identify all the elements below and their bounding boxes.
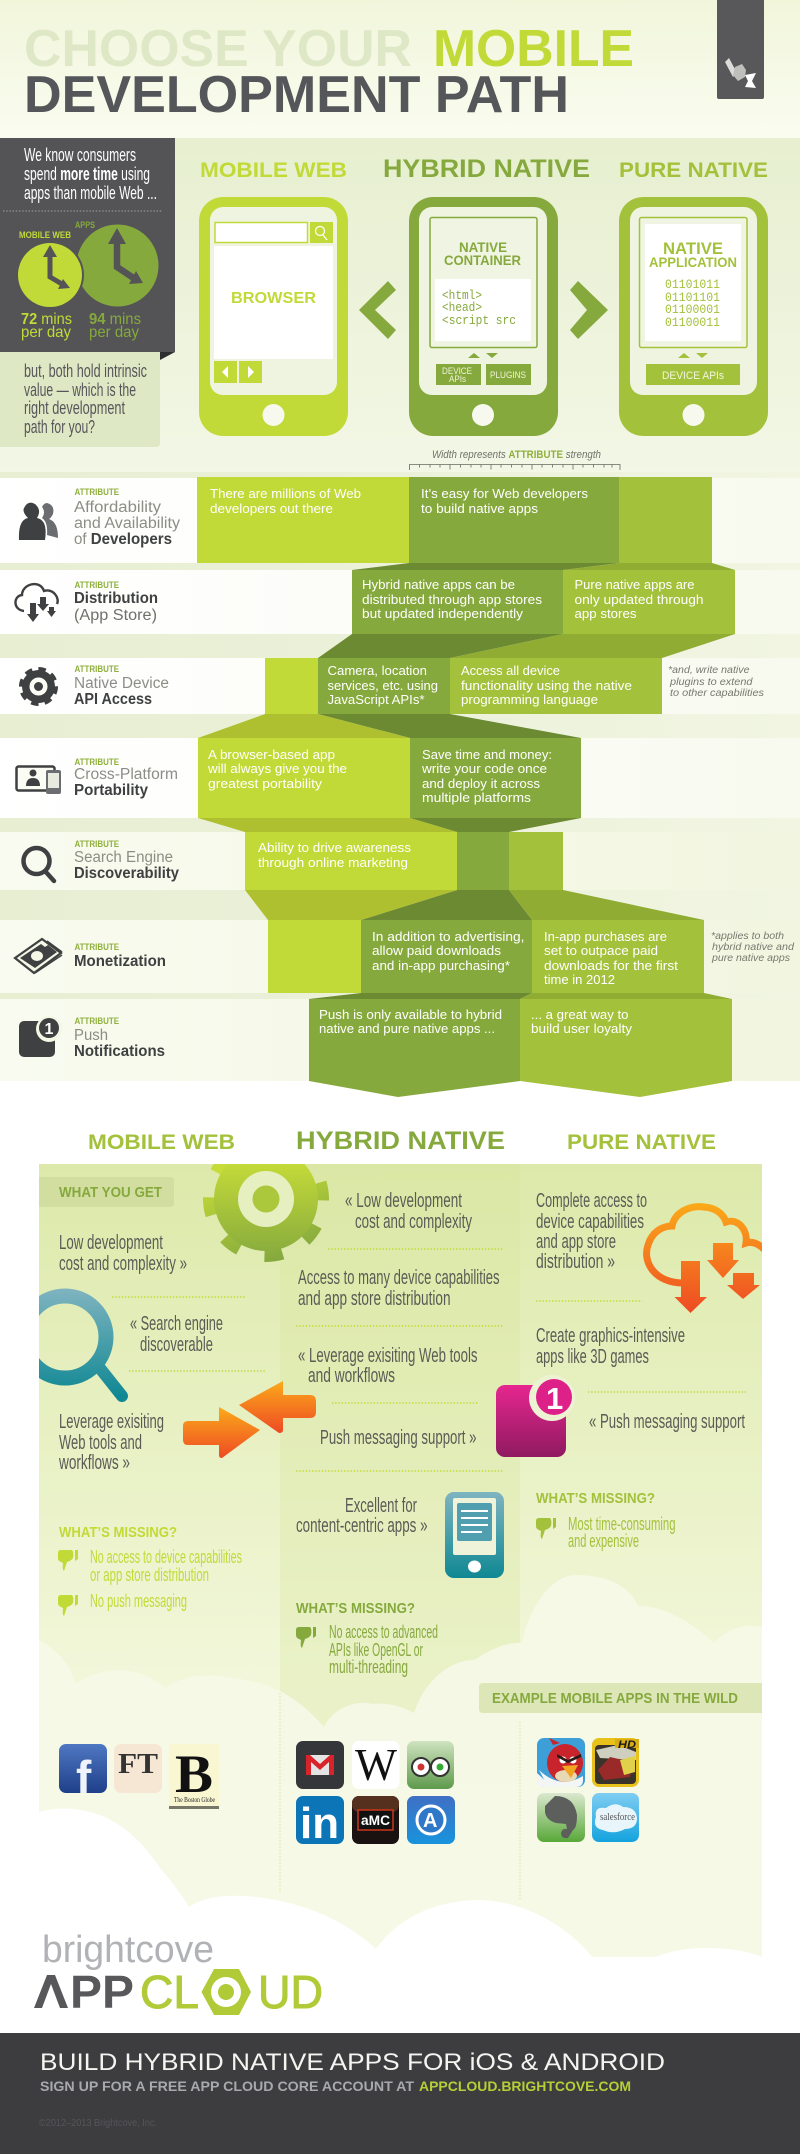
phone: hybrid native: PLUGINS: [490, 370, 526, 380]
missing: pure native: WHAT’S MISSING?: [536, 1490, 655, 1507]
column: hybrid native benefits: « Low development: [345, 1190, 462, 1212]
column: mobile web benefits: « Search engine: [130, 1313, 223, 1335]
phone: pure native: 01101011: [665, 277, 720, 292]
column headings: comparison: MOBILE WEB: [88, 1131, 235, 1154]
panel: question: value — which is the: [24, 380, 136, 400]
logo: brightcove appcloud: [34, 1929, 323, 2018]
missing: mobile web: No push messaging: [90, 1591, 187, 1611]
column headings: MOBILE WEB: [200, 159, 347, 182]
phone: mobile web: [199, 197, 348, 436]
missing: hybrid native: APIs like OpenGL or: [329, 1640, 423, 1660]
row: distribution: ATTRIBUTE: [74, 580, 119, 590]
row: push notifications: Notifications: [74, 1043, 165, 1060]
column dividers: [280, 1693, 520, 1900]
icon: pink notification: [496, 1375, 575, 1457]
panel: question: right development: [24, 398, 125, 418]
row: portability: ATTRIBUTE: [74, 757, 119, 767]
row bands: [0, 472, 800, 1081]
row: api access: plugins to extend: [669, 676, 754, 688]
phone: pure native: 01101101: [665, 290, 720, 305]
column: hybrid native benefits: cost and complexity: [355, 1211, 472, 1233]
row: developers: Affordability: [74, 499, 161, 516]
panel: time spent: 94 mins: [89, 311, 141, 328]
row: distribution: app stores: [574, 606, 637, 621]
app icons: pure native: [537, 1738, 639, 1842]
arrow: left: [359, 281, 396, 339]
title: CHOOSE YOUR: [24, 20, 412, 78]
row: api access: *and, write native: [668, 664, 750, 676]
footer: APPCLOUD.BRIGHTCOVE.COM: [419, 2078, 631, 2094]
app icons: hybrid native: in: [300, 1799, 339, 1848]
row: distribution: Hybrid native apps can be: [362, 577, 515, 592]
row: search: Search Engine: [74, 849, 173, 866]
missing: hybrid native: [296, 1600, 438, 1677]
column headings: comparison: [88, 1127, 716, 1155]
app icons: hybrid native: aMC: [361, 1812, 390, 1828]
example apps label: [479, 1683, 762, 1713]
logo: brightcove appcloud: PP: [70, 1966, 134, 2018]
column: pure native benefits: Create graphics-intensive: [536, 1325, 685, 1347]
app icons: pure native: HD: [618, 1739, 636, 1751]
scale legend: Width represents ATTRIBUTE strength: [432, 449, 601, 461]
column: hybrid native benefits: and app store distribution: [298, 1288, 450, 1310]
panel: time spent: apps than mobile Web ...: [24, 183, 157, 203]
panel: hybrid column tint: [280, 1164, 520, 1784]
row: monetization: [15, 929, 795, 987]
app icons: mobile web: f: [76, 1751, 92, 1803]
row: push notifications: [19, 1007, 633, 1060]
app icons: mobile web: The Boston Globe: [174, 1796, 215, 1804]
intro section background: [0, 138, 800, 478]
scale legend: [410, 449, 620, 470]
row: push notifications: Push: [74, 1027, 108, 1044]
row: developers: There are millions of Web: [210, 486, 361, 501]
row: api access: API Access: [74, 691, 152, 708]
phone: pure native: 01100011: [665, 315, 720, 330]
footer: BUILD HYBRID NATIVE APPS FOR iOS & ANDROID: [40, 2049, 665, 2076]
footer: ©2012–2013 Brightcove, Inc.: [39, 2118, 157, 2129]
foreground white cloud: [39, 1808, 762, 2033]
row: push notifications: ... a great way to: [531, 1007, 628, 1022]
panel: time spent: We know consumers: [24, 145, 136, 165]
phone: hybrid native: [409, 197, 558, 436]
app icons: hybrid native: W: [355, 1739, 398, 1790]
app icons: hybrid native: A: [423, 1810, 437, 1832]
row: monetization: allow paid downloads: [372, 943, 502, 958]
column: mobile web benefits: discoverable: [140, 1334, 213, 1356]
row: portability: Portability: [74, 782, 148, 799]
missing: pure native: and expensive: [568, 1531, 639, 1551]
icon: pink notification: 1: [546, 1381, 563, 1416]
arrow: right: [570, 281, 608, 339]
app icons: mobile web: [59, 1744, 219, 1809]
row: push notifications: native and pure native apps ...: [319, 1021, 495, 1036]
panel: comparison background: [39, 1164, 762, 1957]
row: portability: multiple platforms: [422, 790, 532, 805]
phone: pure native: [619, 197, 768, 436]
title: [24, 20, 634, 124]
column: hybrid native benefits: Excellent for: [345, 1495, 417, 1517]
row: api access: functionality using the native: [461, 678, 632, 693]
icon: teal phone: [445, 1492, 504, 1578]
what you get label: [39, 1177, 174, 1207]
missing: mobile web: [58, 1524, 242, 1616]
phone: pure native: NATIVE: [663, 239, 723, 258]
row: monetization: Monetization: [74, 953, 166, 970]
row: api access: Camera, location: [328, 663, 427, 678]
row: monetization: hybrid native and: [712, 941, 795, 953]
panel: time spent: per day: [21, 324, 71, 341]
panel: time spent: 72 mins: [21, 311, 72, 328]
logo: brightcove appcloud: brightcove: [42, 1929, 214, 1971]
icon: orange left arrow: [239, 1381, 316, 1433]
row: push notifications: ATTRIBUTE: [74, 1016, 119, 1026]
row: search: through online marketing: [258, 855, 408, 870]
missing: pure native: Most time-consuming: [568, 1514, 676, 1534]
row: developers: of Developers: [74, 531, 172, 548]
missing: mobile web: WHAT’S MISSING?: [59, 1524, 177, 1541]
missing: hybrid native: No access to advanced: [329, 1622, 438, 1642]
row: push notifications: 1: [44, 1021, 54, 1038]
row: developers: and Availability: [74, 515, 180, 532]
row: monetization: and in-app purchasing*: [372, 958, 510, 973]
logo tab: [717, 0, 764, 99]
row: distribution: but updated independently: [362, 606, 524, 621]
row: monetization: ATTRIBUTE: [74, 942, 119, 952]
phone: pure native: APPLICATION: [649, 254, 737, 270]
logo: brightcove appcloud: CL: [140, 1966, 199, 2018]
phone: pure native: DEVICE APIs: [662, 370, 724, 382]
row: developers: to build native apps: [421, 501, 539, 516]
row: api access: services, etc. using: [328, 678, 438, 693]
row: monetization: time in 2012: [544, 972, 615, 987]
app icons: hybrid native: [296, 1739, 455, 1848]
panel: time spent: per day: [89, 324, 139, 341]
row: api access: programming language: [461, 692, 598, 707]
missing: mobile web: No access to device capabilities: [90, 1547, 242, 1567]
footer: SIGN UP FOR A FREE APP CLOUD CORE ACCOUNT AT: [40, 2078, 414, 2094]
column: mobile web benefits: Leverage exisiting: [59, 1411, 164, 1433]
row: developers: It’s easy for Web developers: [421, 486, 588, 501]
example apps label: EXAMPLE MOBILE APPS IN THE WILD: [492, 1690, 738, 1707]
column: hybrid native benefits: « Leverage exisiting Web tools: [298, 1345, 478, 1367]
panel: time spent: APPS: [75, 220, 95, 230]
row: monetization: In addition to advertising,: [372, 929, 524, 944]
column: pure native benefits: distribution »: [536, 1251, 615, 1273]
column: pure native benefits: Complete access to: [536, 1190, 647, 1212]
row: monetization: *applies to both: [711, 930, 784, 942]
row: monetization: set to outpace paid: [544, 943, 658, 958]
row: api access: ATTRIBUTE: [74, 664, 119, 674]
column: hybrid native benefits: and workflows: [308, 1365, 395, 1387]
row: distribution: Pure native apps are: [574, 577, 694, 592]
panel: time spent: spend more time using: [24, 164, 150, 184]
column: mobile web benefits: Web tools and: [59, 1432, 142, 1454]
row: developers: developers out there: [210, 501, 333, 516]
chart: flowing strength bars: [197, 477, 735, 1097]
row: api access: to other capabilities: [670, 687, 765, 699]
title: DEVELOPMENT PATH: [24, 66, 569, 124]
phone: hybrid native: NATIVE: [459, 239, 507, 255]
row: api access: Access all device: [461, 663, 560, 678]
icon: orange right arrow: [183, 1407, 260, 1458]
row: developers: ATTRIBUTE: [74, 487, 119, 497]
column: pure native benefits: apps like 3D games: [536, 1346, 649, 1368]
what you get label: WHAT YOU GET: [59, 1184, 162, 1201]
row: distribution: distributed through app stores: [362, 592, 543, 607]
row: distribution: (App Store): [74, 607, 157, 624]
row: distribution: Distribution: [74, 590, 158, 607]
icon: magnifier: [24, 1296, 122, 1396]
panel: time spent: [0, 138, 175, 360]
row: search: [24, 839, 412, 882]
row: search: Ability to drive awareness: [258, 840, 412, 855]
row: api access: JavaScript APIs*: [328, 692, 424, 707]
phone: pure native: 01100001: [665, 302, 720, 317]
row: portability: and deploy it across: [422, 776, 541, 791]
row: api access: Native Device: [74, 675, 169, 692]
column: pure native benefits: and app store: [536, 1231, 616, 1253]
phone: hybrid native: CONTAINER: [444, 252, 521, 268]
title: MOBILE: [433, 20, 634, 78]
row: api access: [21, 663, 765, 708]
row: distribution: only updated through: [574, 592, 704, 607]
row: portability: write your code once: [421, 761, 547, 776]
row: portability: [16, 747, 552, 805]
row: push notifications: build user loyalty: [531, 1021, 633, 1036]
phone: hybrid native: APIs: [449, 374, 466, 384]
column headings: comparison: HYBRID NATIVE: [296, 1127, 505, 1155]
row: portability: A browser-based app: [208, 747, 335, 762]
panel: question: but, both hold intrinsic: [24, 361, 147, 381]
column: mobile web benefits: [58, 1232, 265, 1474]
panel: question: [0, 352, 160, 447]
panel: question: path for you?: [24, 417, 95, 437]
row: developers: [19, 486, 588, 548]
row: monetization: downloads for the first: [544, 958, 678, 973]
row: push notifications: Push is only available to hybrid: [319, 1007, 502, 1022]
panel: time spent: MOBILE WEB: [19, 230, 71, 240]
row: search: ATTRIBUTE: [74, 839, 119, 849]
column: hybrid native benefits: Push messaging support »: [320, 1427, 476, 1449]
missing: mobile web: or app store distribution: [90, 1565, 209, 1585]
column headings: comparison: PURE NATIVE: [567, 1131, 716, 1154]
app icons: pure native: salesforce: [600, 1811, 635, 1823]
row: search: Discoverability: [74, 865, 179, 882]
logo: brightcove appcloud: UD: [258, 1966, 323, 2018]
background cloud: [39, 1575, 762, 1957]
phone: hybrid native: <script src: [442, 313, 516, 328]
footer: [0, 2033, 800, 2154]
row: monetization: In-app purchases are: [544, 929, 667, 944]
phone: hybrid native: <head>: [442, 300, 482, 315]
app icons: mobile web: B: [175, 1744, 213, 1804]
header background: [0, 0, 800, 138]
column: pure native benefits: device capabilities: [536, 1211, 644, 1233]
missing: hybrid native: WHAT’S MISSING?: [296, 1600, 415, 1617]
column: hybrid native benefits: Access to many device capabilities: [298, 1267, 500, 1289]
row: portability: will always give you the: [207, 761, 347, 776]
icon: gear: [203, 1164, 329, 1262]
row: portability: greatest portability: [208, 776, 323, 791]
column: hybrid native benefits: [296, 1190, 504, 1537]
row: portability: Cross-Platform: [74, 766, 178, 783]
row: distribution: [15, 577, 704, 624]
phone: mobile web: BROWSER: [231, 290, 316, 307]
column: pure native benefits: [536, 1190, 746, 1433]
column: hybrid native benefits: content-centric apps »: [296, 1515, 428, 1537]
row: monetization: pure native apps: [711, 952, 791, 964]
column headings: HYBRID NATIVE: [383, 155, 590, 183]
missing: pure native: [536, 1490, 676, 1551]
column: mobile web benefits: cost and complexity »: [59, 1253, 187, 1275]
missing: hybrid native: multi-threading: [329, 1657, 408, 1677]
phone: hybrid native: DEVICE: [442, 366, 472, 376]
phone: hybrid native: <html>: [442, 288, 482, 303]
column: mobile web benefits: Low development: [59, 1232, 163, 1254]
column headings: PURE NATIVE: [619, 159, 768, 182]
icon: orange cloud with arrows: [647, 1207, 765, 1313]
column: mobile web benefits: workflows »: [58, 1452, 130, 1474]
row: portability: Save time and money:: [422, 747, 552, 762]
app icons: mobile web: FT: [118, 1749, 158, 1780]
column headings: [200, 155, 768, 183]
